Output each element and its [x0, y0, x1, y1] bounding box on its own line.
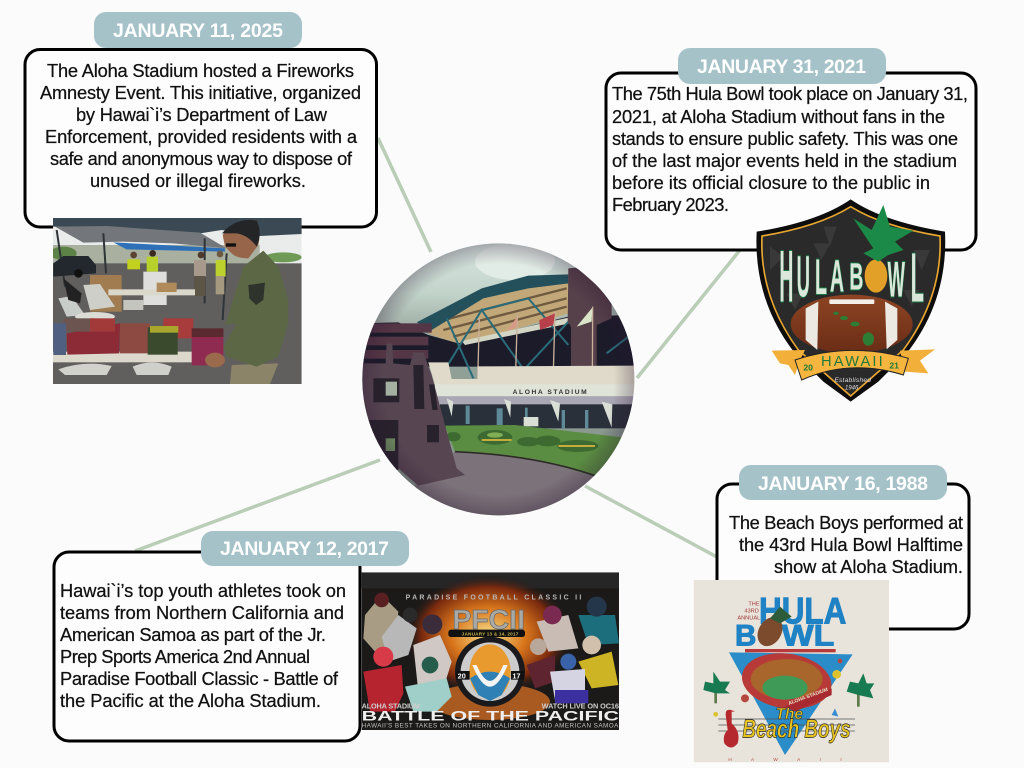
firework boxes: [53, 318, 223, 365]
body text: Prep Sports America 2nd Annual: [60, 646, 310, 667]
poster: Battle of the Pacific: HAWAII'S BEST TAKES ON NORTHERN CALIFORNIA AND AMERICAN SAMOA: [362, 722, 619, 729]
logo: Hula Bowl 2021 shield: HAWAII: [821, 354, 883, 370]
center photo: Aloha Stadium: ALOHA STADIUM: [513, 389, 587, 396]
date pill: [201, 531, 409, 566]
photo: Beach Boys Hula Bowl shirt: Beach Boys: [742, 714, 851, 744]
date pill: JANUARY 12, 2017: [220, 538, 389, 560]
photo: Beach Boys Hula Bowl shirt: 43RD: [744, 608, 759, 614]
tower: [568, 268, 612, 367]
poster: Battle of the Pacific: PFCII: [452, 604, 525, 635]
wall: [428, 362, 635, 385]
body text: February 2023.: [612, 194, 729, 215]
stars and notes: [741, 659, 842, 702]
date pill: [94, 12, 302, 48]
center photo: Aloha Stadium: [362, 243, 634, 516]
triangle: [729, 652, 853, 755]
text box: [717, 484, 969, 629]
wordmark: A: [830, 251, 844, 302]
poster: Battle of the Pacific: 17: [512, 671, 520, 680]
wordmark: L: [815, 249, 827, 305]
truck: [53, 256, 96, 277]
connector lines: [135, 138, 740, 557]
football: [791, 295, 913, 353]
date pill: JANUARY 31, 2021: [697, 56, 866, 78]
ribbon: [772, 350, 805, 375]
photo: Beach Boys Hula Bowl shirt: [694, 580, 889, 762]
photo: Beach Boys Hula Bowl shirt: H A W A I I: [728, 757, 842, 762]
poster: Battle of the Pacific: BATTLE OF THE PACIFIC: [362, 708, 619, 723]
poster: Battle of the Pacific: [362, 572, 619, 730]
photo: Beach Boys Hula Bowl shirt: B: [735, 620, 756, 653]
logo: Hula Bowl 2021 shield: 1946: [845, 385, 859, 391]
photo: Beach Boys Hula Bowl shirt: THE: [748, 602, 760, 608]
upper deck: [417, 275, 568, 343]
staff lines: [718, 719, 855, 731]
date pill: JANUARY 16, 1988: [758, 473, 928, 495]
logo: Hula Bowl 2021 shield: L: [911, 239, 924, 317]
body text: The Aloha Stadium hosted a Fireworks: [47, 60, 354, 81]
wordmark: U: [797, 245, 810, 310]
date pill: [678, 48, 886, 84]
gravel: [415, 452, 595, 522]
body text: stands to ensure public safety. This was one: [612, 128, 958, 149]
poster: Battle of the Pacific: 20: [458, 671, 466, 680]
palms: [703, 672, 874, 707]
logo: Hula Bowl 2021 shield: 21: [889, 361, 899, 371]
body text: the Pacific at the Aloha Stadium.: [60, 690, 321, 711]
flags: [478, 307, 593, 384]
text box: [606, 73, 976, 250]
poster: Battle of the Pacific: WATCH LIVE ON OC16: [542, 701, 619, 710]
pineapple: [853, 205, 913, 293]
text box: [54, 552, 360, 741]
title: HULA: [759, 589, 846, 631]
lawn: [445, 425, 632, 477]
music note: [724, 710, 739, 747]
body text: [40, 60, 361, 191]
wordmark: [779, 236, 924, 318]
panel: January 16, 1988: [694, 465, 969, 762]
dark concourse: [362, 315, 635, 367]
body text: Amnesty Event. This initiative, organized: [40, 82, 361, 103]
band name: The: [776, 706, 803, 723]
body text: show at Aloha Stadium.: [774, 556, 963, 577]
body text: by Hawai`i’s Department of Law: [76, 104, 328, 125]
logo: Hula Bowl 2021 shield: Established: [834, 377, 871, 384]
officer: [230, 363, 278, 384]
poster: Battle of the Pacific: ALOHA STADIUM: [362, 701, 420, 710]
body text: Paradise Football Classic - Battle of: [60, 668, 339, 689]
monument: [362, 343, 465, 486]
body text: The 75th Hula Bowl took place on January 31,: [612, 83, 968, 104]
date pill: [739, 465, 947, 500]
shield: [756, 199, 945, 402]
center emblem: [455, 637, 525, 707]
sign band: [435, 384, 635, 396]
panel: January 31, 2021: [606, 48, 976, 402]
body text: of the last major events held in the stadium: [612, 150, 957, 171]
canopy: [53, 218, 302, 236]
body text: unused or illegal fireworks.: [90, 170, 306, 191]
body text: Enforcement, provided residents with a: [45, 126, 358, 147]
back table: [143, 272, 167, 305]
players: [363, 593, 619, 712]
body text: [60, 580, 346, 711]
body text: [612, 83, 968, 215]
logo: Hula Bowl 2021 shield: 20: [803, 363, 813, 373]
front table: [53, 352, 192, 362]
ramps: [362, 323, 432, 359]
date pill: JANUARY 11, 2025: [113, 20, 283, 42]
body text: The Beach Boys performed at: [729, 512, 963, 533]
photo: Beach Boys Hula Bowl shirt: WL: [782, 620, 834, 653]
body text: Hawai`i’s top youth athletes took on: [60, 580, 346, 601]
body text: [729, 512, 963, 577]
body text: 2021, at Aloha Stadium without fans in the: [612, 106, 945, 127]
photo: Beach Boys Hula Bowl shirt: ANNUAL: [737, 616, 760, 622]
stadium: [742, 653, 832, 709]
body text: before its official closure to the public in: [612, 172, 930, 193]
body text: American Samoa as part of the Jr.: [60, 624, 326, 645]
logo: Hula Bowl 2021 shield: [756, 199, 945, 402]
poster: Battle of the Pacific: JANUARY 13 & 14, 2017: [462, 631, 519, 636]
panel: January 12, 2017: [54, 531, 619, 741]
body text: teams from Northern California and: [60, 602, 344, 623]
photo: Beach Boys Hula Bowl shirt: ALOHA STADIUM: [788, 687, 829, 707]
photo: fireworks amnesty table: [50, 218, 302, 384]
poster text: PARADISE FOOTBALL CLASSIC II: [406, 594, 581, 601]
body text: safe and anonymous way to dispose of: [50, 148, 353, 169]
wordmark: W: [888, 252, 905, 308]
football and pineapple: [758, 618, 782, 646]
wordmark: B: [849, 255, 863, 298]
text box: [25, 50, 376, 227]
panel: January 11, 2025: [25, 12, 376, 384]
wordmark: H: [779, 236, 793, 318]
staff: [127, 250, 226, 296]
body text: the 43rd Hula Bowl Halftime: [739, 534, 963, 555]
